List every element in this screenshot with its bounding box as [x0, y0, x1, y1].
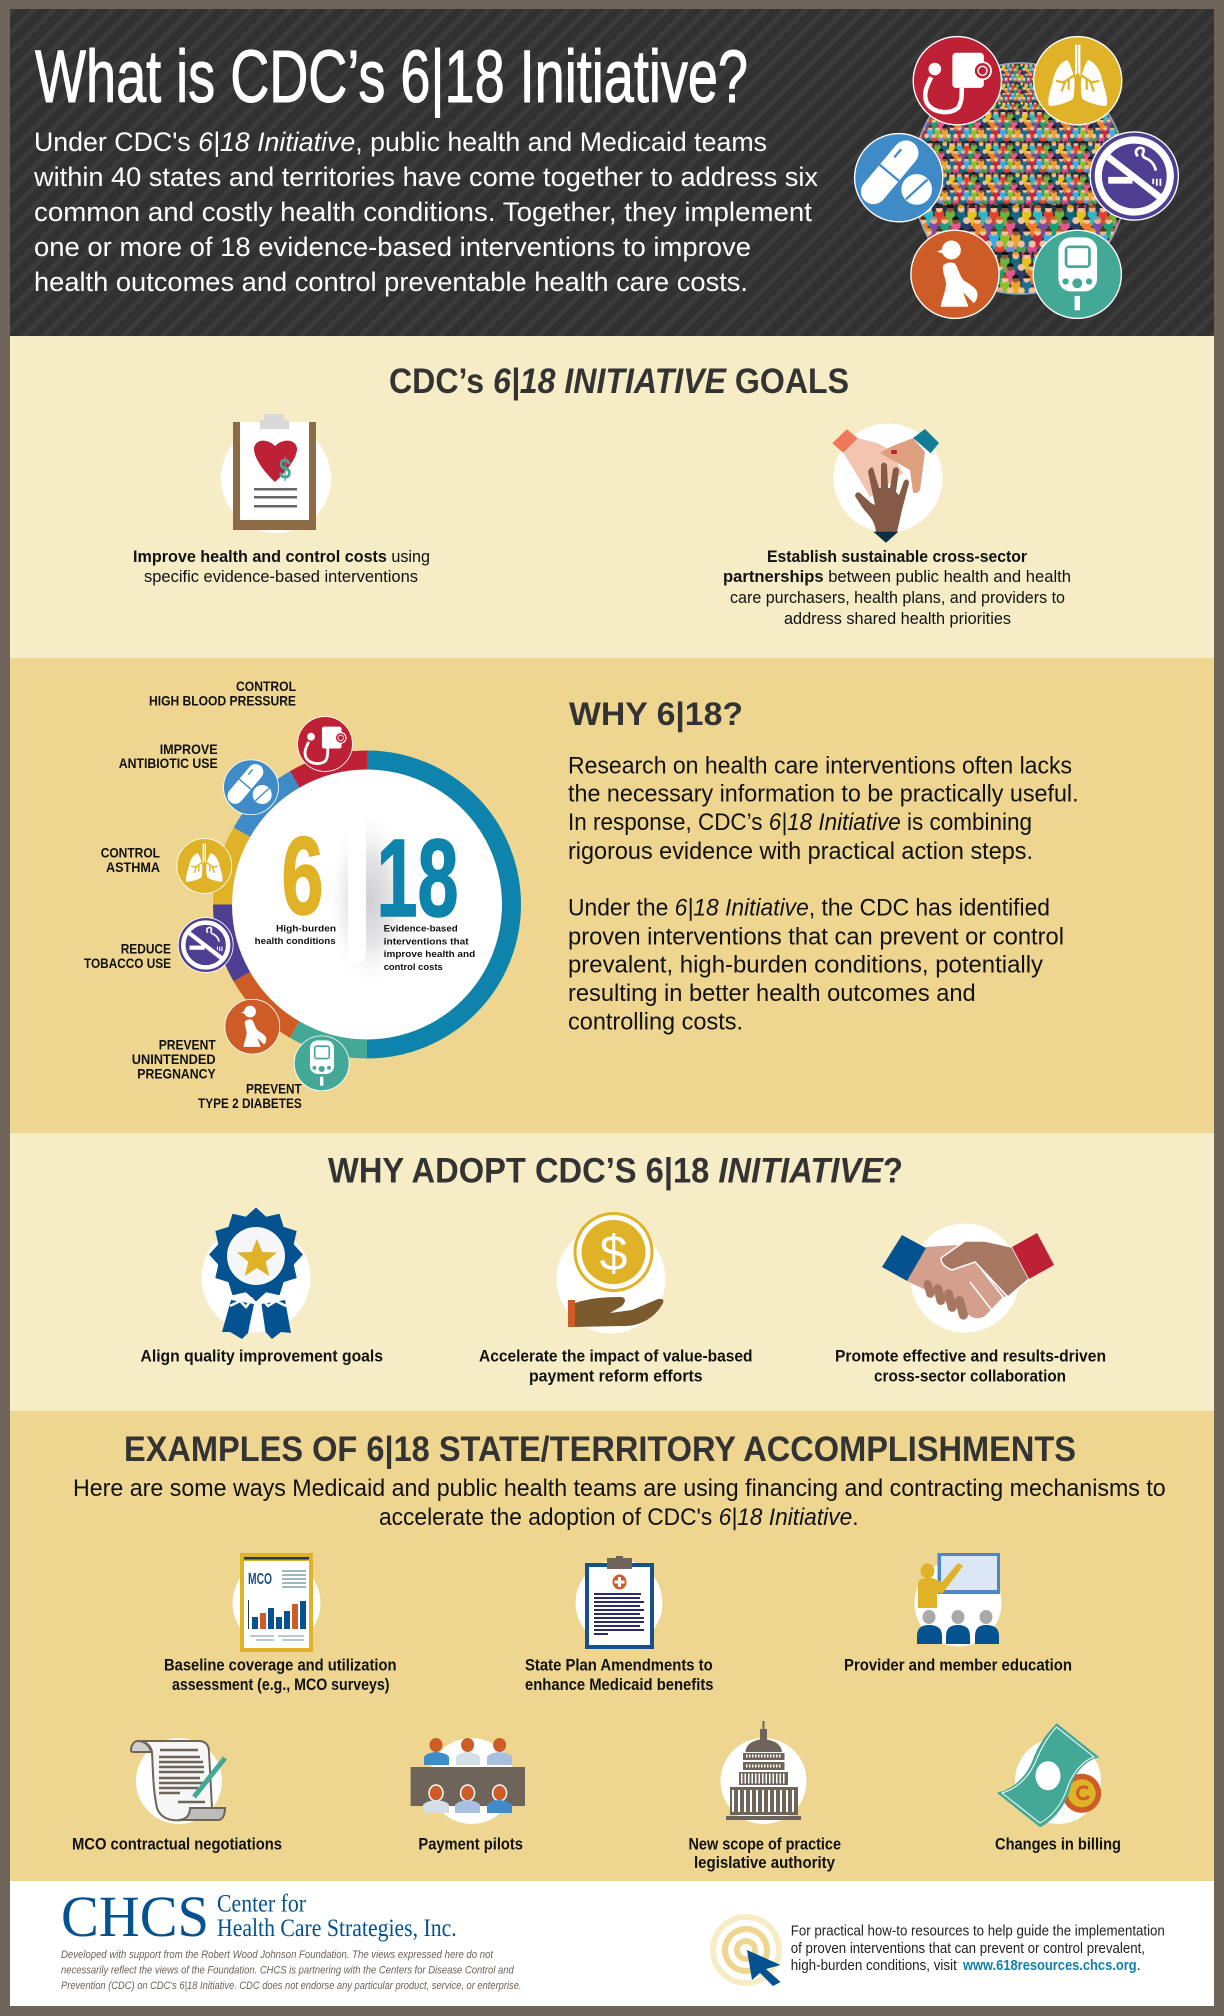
intro paragraph: common and costly health conditions. Together, they implement: [34, 197, 813, 227]
panel: accomplishments: [10, 1411, 1214, 1881]
label: improve antibiotic use: ANTIBIOTIC USE: [119, 755, 218, 771]
disclaimer: necessarily reflect the views of the Foundation. CHCS is partnering with the Centers for Disease Control and: [61, 1965, 514, 1977]
text block: why paragraph 2: prevalent, high-burden conditions, potentially: [568, 952, 1043, 979]
intro paragraph: within 40 states and territories have come together to address six: [33, 162, 818, 192]
caption: state plan: [525, 1656, 714, 1694]
text block: why paragraph 1: [568, 752, 1079, 865]
logo: CHCS: Health Care Strategies, Inc.: [217, 1915, 457, 1942]
label: reduce tobacco use: [84, 941, 171, 971]
label: control asthma: ASTHMA: [106, 859, 160, 875]
ring segment: 18 interventions: [367, 760, 512, 1049]
caption: accelerate: [479, 1347, 752, 1386]
icon: pregnancy: [911, 230, 999, 318]
panel: why adopt: [10, 1133, 1214, 1411]
resources text: of proven interventions that can prevent or control prevalent,: [791, 1940, 1145, 1957]
label: reduce tobacco use: TOBACCO USE: [84, 955, 171, 971]
goal text: improve health: [133, 547, 430, 586]
label: evidence-based: improve health and: [384, 949, 475, 960]
icon: MCO report: MCO: [248, 1571, 272, 1588]
title: What is CDC’s 6|18 Initiative?: [35, 35, 748, 118]
heading: why 6|18: WHY 6|18?: [569, 696, 743, 732]
icon: award ribbon: [202, 1208, 310, 1339]
caption: new scope: New scope of practice: [688, 1834, 841, 1853]
goal text: partnerships: [723, 547, 1071, 628]
heading: why adopt: WHY ADOPT CDC’S 6|18 INITIATIVE?: [328, 1152, 903, 1191]
label: evidence-based: interventions that: [384, 936, 470, 948]
icon: clipboard with heart: $: [279, 453, 291, 486]
label: high-burden: [255, 924, 336, 947]
resources text: [791, 1923, 1165, 1974]
label: control high blood pressure: CONTROL: [236, 678, 296, 694]
icon: capitol building: [720, 1721, 806, 1824]
label: prevent unintended pregnancy: [132, 1037, 216, 1082]
logo: CHCS: Center for: [217, 1891, 307, 1918]
text block: why paragraph 2: controlling costs.: [568, 1008, 743, 1035]
icon: money bill and coin: [997, 1723, 1101, 1827]
icon: joined hands: [832, 424, 942, 543]
center divider: [326, 810, 414, 990]
label: control high blood pressure: HIGH BLOOD PRESSURE: [149, 693, 296, 709]
disclaimer: Prevention (CDC) on CDC's 6|18 Initiative. CDC does not endorse any particular product, service, or enterprise.: [61, 1980, 522, 1992]
goal text: improve health: specific evidence-based interventions: [144, 567, 418, 586]
resources text: www.618resources.chcs.org: [962, 1957, 1137, 1974]
caption: provider education: Provider and member education: [844, 1656, 1072, 1675]
label: prevent type 2 diabetes: PREVENT: [246, 1080, 302, 1096]
icon: handshake: [882, 1224, 1054, 1332]
label: high-burden: High-burden: [276, 924, 336, 934]
intro paragraph: one or more of 18 evidence-based interventions to improve: [34, 232, 751, 262]
caption: promote: [835, 1347, 1106, 1386]
label: improve antibiotic use: [119, 741, 218, 771]
icon: glucose meter: [1033, 230, 1121, 318]
icon: pills: [855, 134, 943, 222]
number 6: 6: [282, 815, 324, 938]
chart: 6|18 ring: [84, 678, 512, 1111]
icon: coin in hand: $: [600, 1225, 627, 1281]
icon: pregnancy small: [225, 999, 280, 1054]
goal text: improve health: Improve health and control costs using: [133, 547, 430, 566]
label: control asthma: CONTROL: [101, 845, 160, 861]
goal text: partnerships: care purchasers, health plans, and providers to: [730, 588, 1065, 607]
icon: contract scroll: [131, 1738, 225, 1824]
icon: lungs: [1034, 37, 1122, 125]
panel: footer: [10, 1881, 1214, 2006]
number 18: 18: [376, 817, 458, 940]
label: prevent type 2 diabetes: [198, 1080, 302, 1111]
ring segments: 6 conditions: [222, 760, 367, 1049]
text block: why paragraph 1: the necessary information to be practically useful.: [568, 781, 1079, 808]
heading: examples: EXAMPLES OF 6|18 STATE/TERRITORY ACCOMPLISHMENTS: [124, 1430, 1076, 1469]
icon: target with cursor: [710, 1914, 782, 1986]
label: evidence-based: control costs: [384, 962, 443, 973]
intro text: examples: [73, 1475, 1166, 1531]
icon: pills small: [224, 760, 278, 815]
text block: why paragraph 1: Research on health care interventions often lacks: [568, 752, 1072, 779]
caption: MCO contractual: MCO contractual negotiations: [72, 1834, 282, 1853]
label: high-burden: health conditions: [255, 936, 336, 947]
text block: why paragraph 1: In response, CDC’s 6|18 Initiative is combining: [568, 809, 1032, 836]
heading: goals: CDC’s 6|18 INITIATIVE GOALS: [389, 362, 849, 401]
icon: no smoking: [1090, 132, 1178, 220]
caption: state plan: enhance Medicaid benefits: [525, 1675, 714, 1694]
label: prevent type 2 diabetes: TYPE 2 DIABETES: [198, 1095, 302, 1111]
caption: promote: cross-sector collaboration: [874, 1367, 1066, 1386]
caption: changes in billing: Changes in billing: [995, 1834, 1121, 1853]
label: control high blood pressure: [149, 678, 296, 709]
caption: promote: Promote effective and results-driven: [835, 1347, 1106, 1366]
caption: payment pilots: Payment pilots: [418, 1834, 523, 1853]
icon: blood pressure small: [298, 717, 352, 771]
goal text: partnerships: Establish sustainable cross-sector: [767, 547, 1027, 566]
intro text: examples: Here are some ways Medicaid and public health teams are using financing and contracting mechanisms to: [73, 1475, 1166, 1502]
goal text: partnerships: partnerships between public health and health: [723, 567, 1071, 586]
caption: align: Align quality improvement goals: [140, 1347, 383, 1366]
intro paragraph: Under CDC's 6|18 Initiative, public health and Medicaid teams: [34, 127, 767, 157]
resources text: .: [1137, 1957, 1141, 1974]
intro paragraph: health outcomes and control preventable health care costs.: [34, 267, 748, 297]
caption: new scope: [688, 1834, 841, 1872]
label: prevent unintended pregnancy: PREVENT: [159, 1037, 216, 1053]
goal text: partnerships: address shared health priorities: [784, 609, 1011, 628]
resources text: For practical how-to resources to help guide the implementation: [791, 1923, 1165, 1940]
icon: provider education: [914, 1553, 1002, 1646]
icon: MCO report: [232, 1553, 320, 1652]
icon: blood pressure: [913, 37, 1001, 125]
caption: state plan: State Plan Amendments to: [525, 1656, 713, 1675]
caption: baseline: assessment (e.g., MCO surveys): [172, 1675, 390, 1694]
resources text: high-burden conditions, visit: [791, 1957, 958, 1974]
text block: why paragraph 2: Under the 6|18 Initiative, the CDC has identified: [568, 895, 1050, 922]
text block: why paragraph 2: [568, 895, 1064, 1035]
crowd illustration: [912, 63, 1128, 295]
label: control asthma: [101, 845, 160, 875]
icon: glucose meter small: [294, 1036, 349, 1091]
caption: accelerate: payment reform efforts: [529, 1367, 703, 1386]
panel: header: [10, 9, 1214, 336]
icon: no smoking small: [178, 918, 233, 972]
icon: lungs small: [177, 839, 232, 893]
intro text: examples: accelerate the adoption of CDC's 6|18 Initiative.: [379, 1504, 859, 1531]
icon: coin in hand: [556, 1212, 666, 1334]
label: improve antibiotic use: IMPROVE: [160, 741, 218, 757]
caption: new scope: legislative authority: [694, 1853, 835, 1872]
label: prevent unintended pregnancy: PREGNANCY: [137, 1066, 216, 1082]
icon: state plan clipboard: [576, 1556, 662, 1649]
icon: payment pilot meeting: [411, 1738, 525, 1824]
logo: CHCS: CHCS: [61, 1884, 209, 1949]
panel: goals: [10, 336, 1214, 658]
panel: why 6|18: [10, 658, 1214, 1133]
disclaimer: Developed with support from the Robert Wood Johnson Foundation. The views expressed here do not: [61, 1949, 494, 1961]
text block: why paragraph 1: rigorous evidence with practical action steps.: [568, 838, 1033, 865]
text block: why paragraph 2: resulting in better health outcomes and: [568, 980, 976, 1007]
logo: CHCS: [61, 1884, 457, 1949]
label: prevent unintended pregnancy: UNINTENDED: [132, 1051, 216, 1067]
icon: clipboard with heart: [221, 414, 331, 533]
disclaimer: [61, 1949, 522, 1992]
label: evidence-based: Evidence-based: [384, 924, 458, 934]
text block: why paragraph 2: proven interventions that can prevent or control: [568, 923, 1064, 950]
label: evidence-based: [384, 924, 475, 973]
caption: baseline: Baseline coverage and utilization: [164, 1656, 396, 1675]
caption: accelerate: Accelerate the impact of value-based: [479, 1347, 752, 1366]
intro paragraph: [33, 127, 818, 297]
label: reduce tobacco use: REDUCE: [121, 941, 171, 957]
caption: baseline: [164, 1656, 396, 1694]
